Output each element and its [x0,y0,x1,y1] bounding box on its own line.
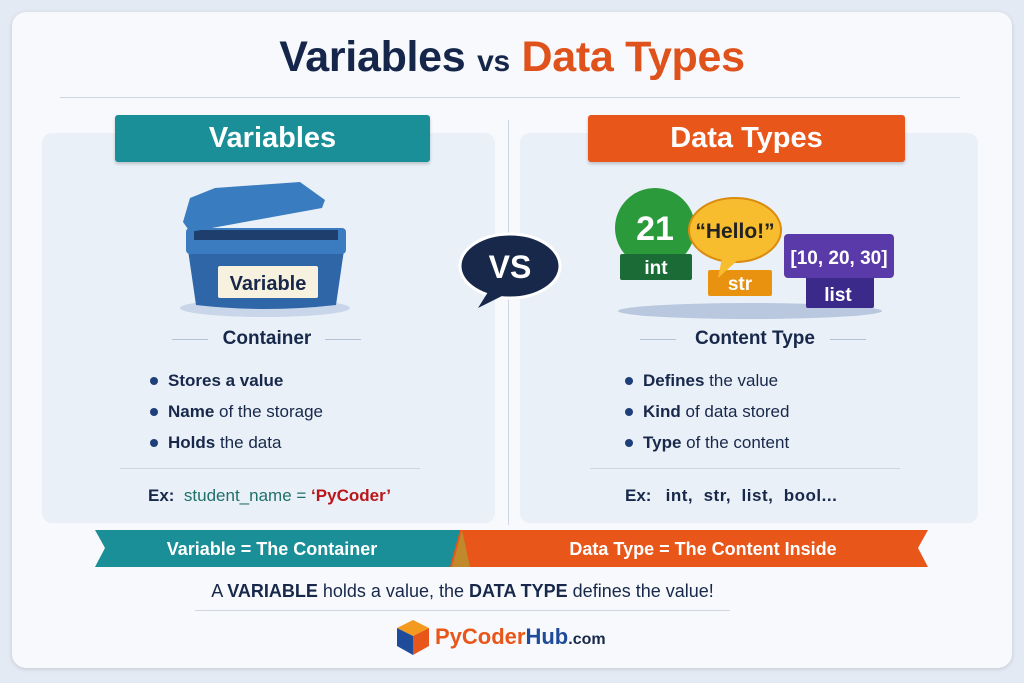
icon: container box: Variable [230,273,306,295]
bullets: variables: Name of the storage [168,402,323,421]
heading: Data Types [588,115,905,162]
bullets: variables: Stores a value [168,371,283,390]
icon: data types: [10, 20, 30] [790,248,888,269]
heading: Variables [115,115,430,162]
logo: PyCoderHub.com [435,624,606,649]
icon: container box [180,182,350,317]
title: Variables vs Data Types [279,33,745,81]
icon: VS bubble [458,232,562,308]
icon: data types: 21 [636,210,674,248]
bullets: variables [150,371,323,452]
icon: data types: “Hello!” [695,220,775,243]
bullets: data types [625,371,790,452]
subheading: Container: Container [223,328,311,349]
example: variables: Ex: student_name = ‘PyCoder’ [148,486,391,505]
example: data types: Ex: int, str, list, bool... [625,486,837,505]
icon: data types: int [644,258,668,279]
icon: data types [615,188,894,319]
icon: data types: str [728,274,753,295]
heading: Variables: Variables [209,122,336,154]
ribbon banner [95,530,928,567]
panel: data types [520,133,978,523]
heading: Data Types: Data Types [670,122,823,154]
panel: variables [42,133,495,523]
logo [397,620,606,655]
ribbon banner: Data Type = The Content Inside [569,539,837,559]
subheading: Content Type: Content Type [695,328,815,349]
bullets: data types: Kind of data stored [643,402,789,421]
icon: data types: list [824,285,852,306]
bullets: data types: Type of the content [643,433,789,452]
summary text: A VARIABLE holds a value, the DATA TYPE defines the value! [211,581,714,601]
icon: VS bubble: VS [489,249,531,285]
bullets: data types: Defines the value [643,371,778,390]
bullets: variables: Holds the data [168,433,281,452]
ribbon banner: Variable = The Container [167,539,377,559]
